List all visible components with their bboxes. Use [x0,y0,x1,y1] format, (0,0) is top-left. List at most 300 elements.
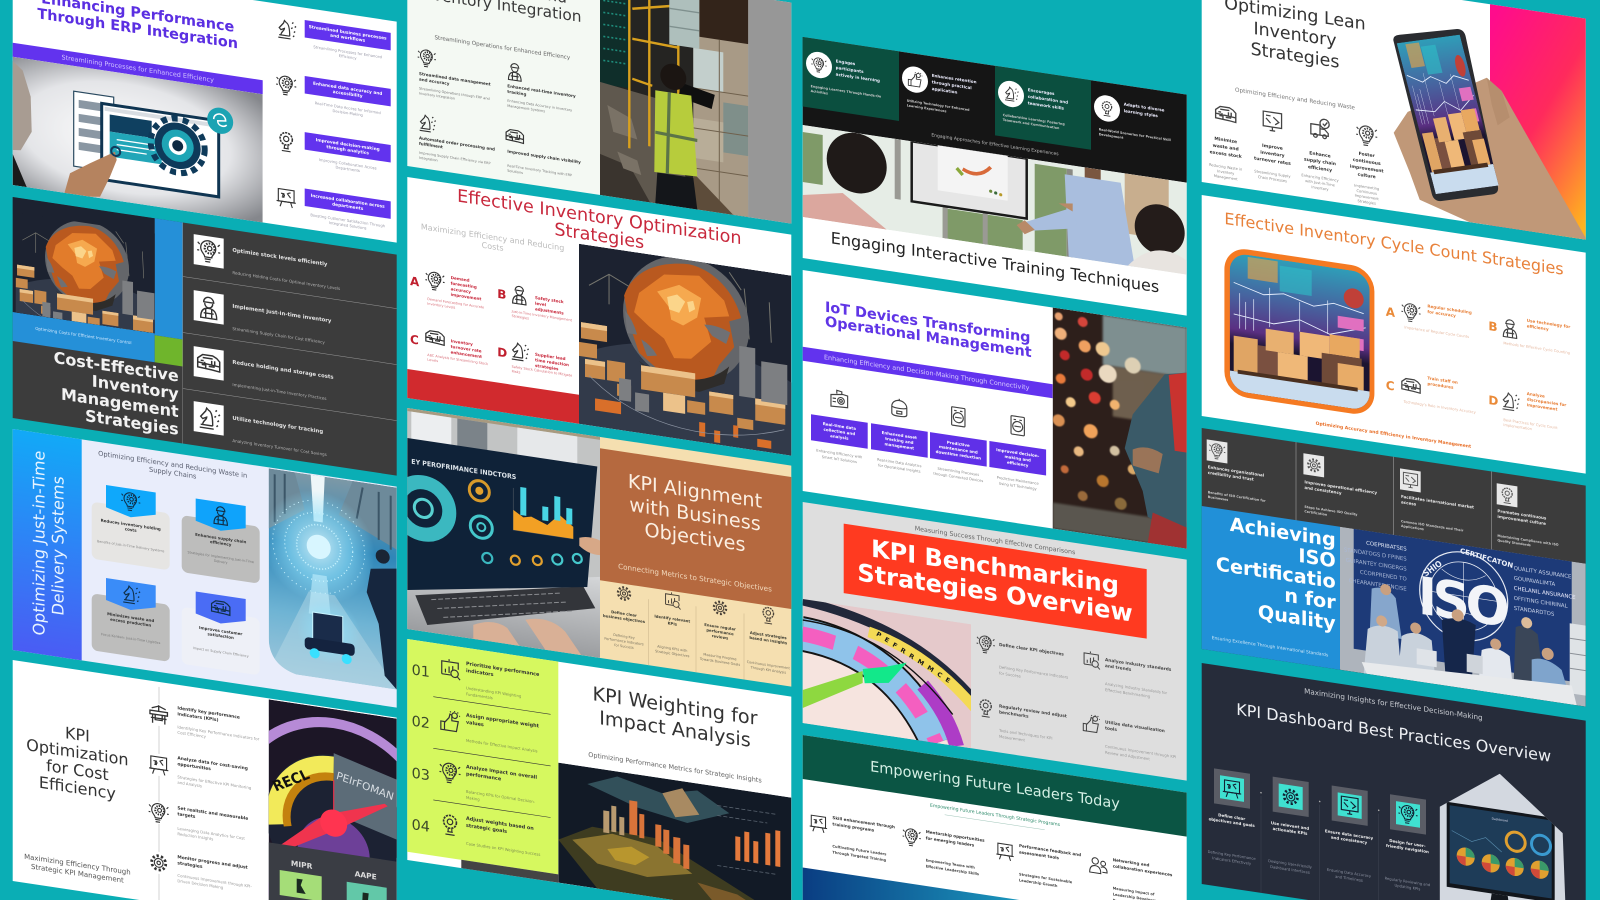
item B [497,283,573,327]
column: improve turnover: Streamlining Supply [1254,169,1291,179]
item: analyze data: Analyze data for cost-saving [177,755,248,772]
card: adapts to styles [1094,93,1171,147]
item B: Just-in-Time Inventory Management [511,309,573,322]
column: real-time data: Smart IoT Solutions [822,455,857,464]
column: enhance supply chain: with Just-in-Time [1305,179,1336,188]
item 01: Prioritize key performance [466,661,540,678]
subtitle: Empowering Future Leaders Through Strategic Programs [930,803,1061,828]
item: supply chain visibility [506,129,581,184]
step: friendly navigation: Regularly Reviewing and [1385,876,1431,887]
column: identify KPIs: Aligning KPIs with [657,645,687,653]
item: improved decision-making: Improved decision-making [316,137,380,153]
item: industry standards: and trends [1105,663,1132,673]
card: enhances retention: through practical [932,79,972,90]
column: real-time data: collection and [824,427,855,436]
card: encourages collaboration: collaboration and [1028,94,1068,105]
item: streamlined data management: Inventory Integration [419,91,455,101]
green title band [803,735,1187,837]
item: identify KPIs: indicators (KPIs) [177,711,218,723]
column: real-time data: analysis [830,433,849,441]
item: industry standards [1084,650,1172,702]
left gradient title panel: Delivery Systems [48,475,67,617]
benefit: market access [1400,468,1474,539]
item B: Use technology for [1527,318,1571,329]
item 01: Fundamentals [466,691,493,700]
card: enhances retention: Learning Experiences [907,103,947,113]
column: improved decisions: making and [1005,454,1031,463]
item: data visualization: Continuous Improvement through KPI [1105,744,1176,759]
item: enhanced data accuracy: Decision-Making [332,109,364,118]
red title box: KPI Benchmarking [871,535,1119,600]
step: friendly navigation: Design for user- [1389,838,1426,848]
item: skill enhancement: Through Targeted Training [832,850,887,862]
card: minimizes waste: Minimizes waste and [107,611,154,623]
photo: ISO team meeting: ISO [1418,566,1510,640]
item A: forecasting [451,281,477,290]
benefit: credibility: Benefits of ISO Certification for [1208,490,1266,503]
item A: Importance of Regular Cycle Counts [1404,325,1469,339]
slide: Empowering Future Leaders Today [803,735,1187,900]
column: improved decisions: efficiency [1007,460,1029,468]
photo: 3D data map [558,763,791,900]
slide: Optimizing Lean Inventory Strategies [1202,0,1587,240]
item D: Analyze [1527,391,1545,399]
item: increased collaboration: Integrated Solutions [329,221,367,231]
benefit: market access: Common ISO Standards and Their [1401,519,1464,533]
photo: globe and warehouse scene [12,197,155,334]
item 03: performance [466,771,502,783]
item C: procedures [1427,381,1454,390]
left gradient title panel [13,429,82,660]
benefit: operational efficiency: Certification [1304,509,1328,517]
left gradient title panel: Optimizing Just-in-Time [30,449,49,637]
item: streamlined business processes: Streamlined business processes [309,24,387,42]
item: analyze data: opportunities [177,761,211,772]
column: foster improvement [1350,124,1384,207]
brown title panel: Connecting Metrics to Strategic Objectives [618,562,772,594]
row: optimize stock levels: Optimize stock levels efficiently [232,248,328,268]
column: improve turnover: inventory [1260,150,1285,159]
slide: Achieving ISO Certification for Quality [1202,428,1586,707]
item: increased collaboration: Boosting Customer Satisfaction Through [310,213,386,228]
benefit: credibility: Businesses [1208,495,1228,502]
card: enhances supply chain [182,496,260,584]
item C: Train staff on [1427,375,1458,385]
slide: Engaging Interactive Training Techniques [803,37,1187,316]
item A: Inventory Levels [427,302,455,310]
item 01: 01 [412,662,430,681]
card: enhances supply chain: efficiency [210,539,232,547]
item: monitor progress [148,850,252,894]
slide title: Strategies [554,220,644,253]
item: monitor progress: strategies [177,860,203,870]
photo: performance dial: PEFRRMMCE [875,630,951,685]
slide title: Inventory [1253,19,1337,51]
subtitle band: Enhancing Efficiency and Decision-Making Through Connectivity [824,353,1030,392]
photo: ISO team meeting: GOUPAVALIMTA [1514,576,1555,588]
column: regular reviews: Towards Business Goals [699,657,740,667]
step: friendly navigation [1385,793,1431,893]
subtitle: Optimizing Efficiency and Reducing Waste [1235,88,1355,112]
item: regular review: Tools and Techniques for KPI [998,728,1052,741]
column: foster improvement: improvement [1350,164,1384,175]
item 03: 03 [412,766,430,784]
photo: ISO team meeting: GUIRANTEY CINGERGS [1346,558,1407,573]
item 02: values [466,720,484,728]
card: reduces holding costs: costs [125,526,137,533]
column: minimize waste: Reducing Waste in [1209,163,1242,172]
step: define objectives: Defining Key Performance [1208,850,1256,861]
photo: ISO team meeting: STANDARDTOS [1514,606,1555,618]
photo: warehouse worker [600,0,748,217]
item: skill enhancement [810,812,895,864]
item D [497,340,572,382]
photo: dashboard monitor [1440,774,1566,900]
benefit: market access: Facilitates international market [1401,494,1474,510]
item: networking: Measuring Impact of [1113,886,1155,897]
item: industry standards: Analyze industry standards [1105,657,1172,673]
item 04: strategic goals [466,823,507,835]
item B: adjustments [535,306,564,316]
photo: laptop with KPI dashboard [397,406,601,658]
item: set targets: Set realistic and measurable [177,805,248,822]
subtitle band: Streamlining Processes for Enhanced Efficiency [61,53,214,84]
subtitle band [13,43,263,94]
item: increased collaboration: Increased collaboration across [311,193,385,210]
slide title: Management [61,385,179,421]
subtitle: Measuring Success Through Effective Comparisons [915,525,1075,556]
card: enhances retention: Enhances retention [932,73,977,84]
column: improve turnover: turnover rates [1254,156,1291,167]
item: automated orders: Improving Supply Chain Efficiency via ERP [419,151,491,165]
item: data visualization [1083,713,1176,765]
slide title: KPI Weighting for [593,682,758,730]
column: define objectives: Performance Indicators [604,637,644,646]
item A: accuracy [451,286,471,294]
subtitle: Maximizing Insights for Effective Decision-Making [1304,686,1483,722]
item: regular review [980,699,1067,749]
item: identify KPIs [148,701,260,747]
column: adjust strategies: Continuous Improvement [747,660,790,670]
item B: Methods for Effective Cycle Counting [1503,341,1570,355]
slide: KPI Optimization for Cost Efficiency [13,660,434,900]
benefit: operational efficiency: and consistency [1304,485,1342,496]
column: foster improvement: Strategies [1358,199,1376,206]
item: regular review: Measurement [999,734,1026,743]
item A: improvement [451,292,481,301]
column: asset tracking [871,395,928,475]
column: minimize waste: Management [1214,174,1238,182]
blue title panel: n for [1284,583,1336,614]
slide title: Effective Inventory Optimization [457,187,742,249]
item 02: 02 [412,714,430,732]
benefit: continuous improvement: Quality Standards [1497,538,1531,547]
item: analyze data: and Analysis [177,780,202,788]
item: streamlined business processes: Streamlining Processes for Enhanced [313,45,383,59]
image caption: Optimizing Costs for Efficient Inventory Control [35,326,132,345]
row: implement just-in-time: Streamlining Supply Chain for Cost Efficiency [232,326,325,345]
item: automated orders [419,114,495,171]
item 04: Case Studies on KPI Weighting Success [466,841,540,857]
slide title: Inventory [92,371,179,403]
item 03: Balancing KPIs for Optimal Decision- [466,789,536,804]
benefit: operational efficiency: Steps to Achieve ISO Quality [1304,505,1358,517]
photo: dashboard monitor: Dashboard [1492,817,1508,823]
step: relevant KPIs: Dashboard Interfaces [1270,865,1310,875]
item: real-time tracking: tracking [507,89,526,97]
item C: C [1386,378,1395,394]
item D: discrepancies for [1527,397,1567,408]
grey side strip [748,0,791,224]
card: enhances supply chain: Enhances supply chain [195,532,246,544]
photo: globe and warehouse scene [579,244,792,456]
item: regular review: benchmarks [999,709,1029,720]
item B [1488,312,1571,355]
slide: IoT Devices Transforming Operational Management [803,270,1187,549]
subtitle: Strategic KPI Management [31,862,124,885]
photo: ISO team meeting: OFFITING CIHIRINAL [1514,596,1568,610]
photo: ISO team meeting: CCORPRENED TO [1360,570,1407,583]
column: predictive maintenance: downtime reduction [936,449,981,461]
item 04: 04 [412,817,430,836]
row: utilize technology: Analyzing Inventory Turnover for Cost Savings [232,438,327,457]
column: foster improvement: Foster [1359,151,1375,159]
chart: performance gauge photo: AAPE [355,869,377,882]
column: enhance supply chain: Enhance [1309,150,1331,160]
column: real-time data: Enhancing Efficiency with [816,449,862,459]
benefit: continuous improvement: Promotes continuous [1497,508,1547,521]
item C: Technology's Role in Inventory Accuracy [1403,400,1477,415]
photo: bokeh lights and person [1053,308,1187,549]
item: streamlined data management [418,49,491,106]
item: mentorship [903,826,985,877]
item 01: indicators [466,668,494,678]
column: define objectives: business objectives [603,613,646,624]
blue title panel: Certificatio [1216,552,1336,593]
column: foster improvement: Improvement [1355,194,1379,201]
item D: strategies [535,363,559,371]
card: minimizes waste [92,576,170,662]
card: enhances retention [902,65,977,118]
item: define objectives: Defining Key Performance Indicators [999,664,1068,680]
item 04: Adjust weights based on [466,816,534,832]
item: set targets [148,800,248,847]
column: minimize waste [1209,105,1243,182]
row: utilize technology [194,401,327,457]
benefit: operational efficiency: Improves operational efficiency [1304,479,1377,495]
item: monitor progress: Monitor progress and adjust [177,854,248,871]
chart: performance gauge photo: MIPR [291,859,313,871]
item C: C [410,332,419,348]
item: real-time tracking: Management Systems [507,104,545,113]
column: improve turnover [1254,110,1291,184]
slide: Effective Inventory Optimization Strategies [407,177,792,456]
photo: ISO team meeting [1340,527,1586,707]
slide: Effective Inventory Cycle Count Strategies [1202,195,1586,474]
step: data accuracy: and consistency [1331,835,1368,845]
item: automated orders: Automated order processing and [419,135,495,152]
row: optimize stock levels [194,234,340,291]
benefit: operational efficiency [1303,453,1377,524]
item D: D [1488,393,1498,408]
item: streamlined business processes: and workflows [330,33,366,44]
row: implement just-in-time: Implement just-in-time inventory [232,304,332,325]
item: set targets: targets [177,811,196,820]
item: enhanced data accuracy: Real-Time Data Access for Informed [315,101,381,115]
photo: hand touching ERP screen [13,57,263,226]
photo: ISO team meeting: STANDATOGS D FPINES [1344,547,1407,563]
item D: Risks [512,369,521,375]
item: mentorship: for emerging leaders [926,835,975,848]
item: identify KPIs: Cost Efficiency [177,730,207,739]
chart: performance gauge photo [268,700,397,900]
item: identify KPIs: Identifying Key Performance Indicators for [177,724,260,742]
gradient side panel [1490,4,1586,240]
item D: Best Practices for Cycle Count [1503,418,1558,430]
photo: ISO team meeting: COEPRIBATSES [1366,541,1407,553]
step: friendly navigation: Updating KPIs [1395,884,1420,891]
item: enhanced data accuracy: Enhanced data accuracy and [313,81,382,97]
benefit: credibility [1207,439,1266,508]
green title band: Empowering Future Leaders Today [870,758,1120,813]
column: improved decisions: Using IoT Technology [999,482,1037,491]
item 02 [412,704,540,754]
chart: performance gauge photo: RECL [270,767,312,795]
item D: Supplier lead [535,352,566,361]
column: adjust strategies: Adjust strategies [750,630,787,641]
brown title panel: KPI Alignment [628,470,763,513]
slide title: KPI [65,723,90,746]
card: enhances supply chain: Strategies for Implementing Just-in-Time [188,550,254,564]
item: supply chain visibility: Real-Time Inventory Tracking with ERP [507,164,572,177]
item: supply chain visibility: Improved supply chain visibility [507,149,581,165]
chart: performance gauge photo: PEIrFOMAN [335,770,395,803]
item: set targets: Leveraging Data Analytics for Cost [177,826,245,841]
slide: KPI Benchmarking Strategies Overview [803,502,1187,781]
item: skill enhancement: Cultivating Future Leaders [832,844,886,856]
column: regular reviews [699,599,740,667]
item: regular review: Regularly review and adjust [999,703,1067,720]
item 01: Understanding KPI Weighting [466,685,522,699]
column: asset tracking: Real-time Data Analytics [877,458,922,468]
blue title panel: Achieving [1230,513,1336,552]
column: minimize waste: Inventory [1217,169,1235,176]
slide title: Strategies [85,406,179,439]
item: enhanced data accuracy [276,72,391,122]
step: relevant KPIs: Use relevant and [1271,820,1309,831]
item A: Demand Forecasting for Accurate [427,297,484,310]
column: improve turnover: Improve [1262,143,1283,152]
column: improve turnover: Chain Processes [1258,175,1287,183]
item C: ABC Analysis for Streamlining Stock [427,353,488,366]
item A: Regular scheduling [1427,303,1472,315]
item C: enhancement [451,350,482,359]
slide title: for Cost [46,756,109,784]
item B: B [497,287,506,302]
item: networking: collaboration experiences [1113,863,1173,877]
card: encourages collaboration: teamwork skills [1028,100,1065,111]
column: predictive maintenance [930,403,987,484]
item: performance feedback: assessment tools [1019,849,1060,860]
column: real-time data [811,386,868,466]
card: adapts to styles: Adapts to diverse [1124,102,1165,113]
card: engages participants: actively in learning [836,72,880,83]
slide: Enhancing Performance Through ERP Integration [13,0,397,247]
red footer bar [407,369,579,424]
item D: Implementation [1503,423,1532,431]
item 01 [412,653,540,707]
column: asset tracking: tracking and [885,436,914,445]
item: increased collaboration: departments [332,201,364,212]
item: improved decision-making [280,128,391,178]
step: friendly navigation: friendly navigation [1386,843,1429,854]
item 03: Making [466,795,480,802]
column: minimize waste: Minimize [1214,136,1237,145]
item D: Safety Stock Calculation to Mitigate [512,365,572,378]
column: predictive maintenance: maintenance and [939,444,978,455]
step: relevant KPIs [1268,776,1313,875]
item: data visualization: Review and Adjustment [1105,750,1150,761]
card: improves satisfaction: satisfaction [208,631,234,640]
column: identify KPIs: Strategic Objectives [655,649,690,658]
column: enhance supply chain: efficiency [1308,164,1332,174]
blue title panel: ISO [1298,544,1336,572]
benefit: market access: access [1401,499,1417,507]
item 04 [412,808,540,857]
column: enhance supply chain: supply chain [1304,157,1336,167]
slide title: Strategies [1251,40,1339,73]
card: minimizes waste: Focus Kanban: Just-in-Time Logistics [101,632,161,645]
item: performance feedback: Leadership Growth [1019,878,1058,888]
column: define objectives: for Success [614,643,634,650]
slide title: Engaging Interactive Training Techniques [831,228,1159,296]
column: predictive maintenance: Streamlining Processes [937,467,979,477]
item: data visualization: tools [1105,725,1117,733]
column: foster improvement: culture [1358,172,1376,180]
card: enhances supply chain: Delivery [214,559,228,565]
slide title: Optimization [26,735,129,769]
slide: KPI Dashboard Best Practices Overview [1202,663,1586,900]
column: define objectives: Defining Key [613,633,635,640]
subtitle: Maximizing Efficiency Through [24,852,131,877]
column: foster improvement: continuous [1353,157,1381,167]
item: mentorship: Empowering Teams with [926,858,975,870]
item D: improvement [1527,402,1557,412]
benefit: credibility: Enhances organizational [1208,464,1265,478]
column: asset tracking: Enhanced asset [882,430,917,440]
column: adjust strategies: Through KPI Analysis [750,665,786,675]
item 02: Methods for Effective Impact Analysis [466,738,538,753]
step: relevant KPIs: Designing User-Friendly [1268,859,1313,870]
item: streamlined business processes: Efficiency [339,54,357,61]
blue title panel [1202,506,1340,670]
slide title: Impact Analysis [599,706,751,752]
column: real-time data: Real-time data [823,421,856,431]
top benefits band [803,37,1187,183]
slide title: Through ERP Integration [37,6,238,52]
item: streamlined business processes [278,16,391,66]
column: asset tracking: management [885,441,914,451]
benefit: credibility: credibility and trust [1208,470,1254,482]
card: engages participants: participants [836,65,864,74]
item: real-time tracking: Enhancing Data Accuracy in Inventory [507,99,572,112]
item: industry standards: Analyzing Industry Standards for [1105,681,1168,695]
slide title: Operational Management [825,314,1032,361]
item B: Safety stock [535,295,564,304]
item A: Demand [451,275,470,283]
green list panel [407,639,558,874]
benefit: market access: Applications [1401,524,1424,531]
